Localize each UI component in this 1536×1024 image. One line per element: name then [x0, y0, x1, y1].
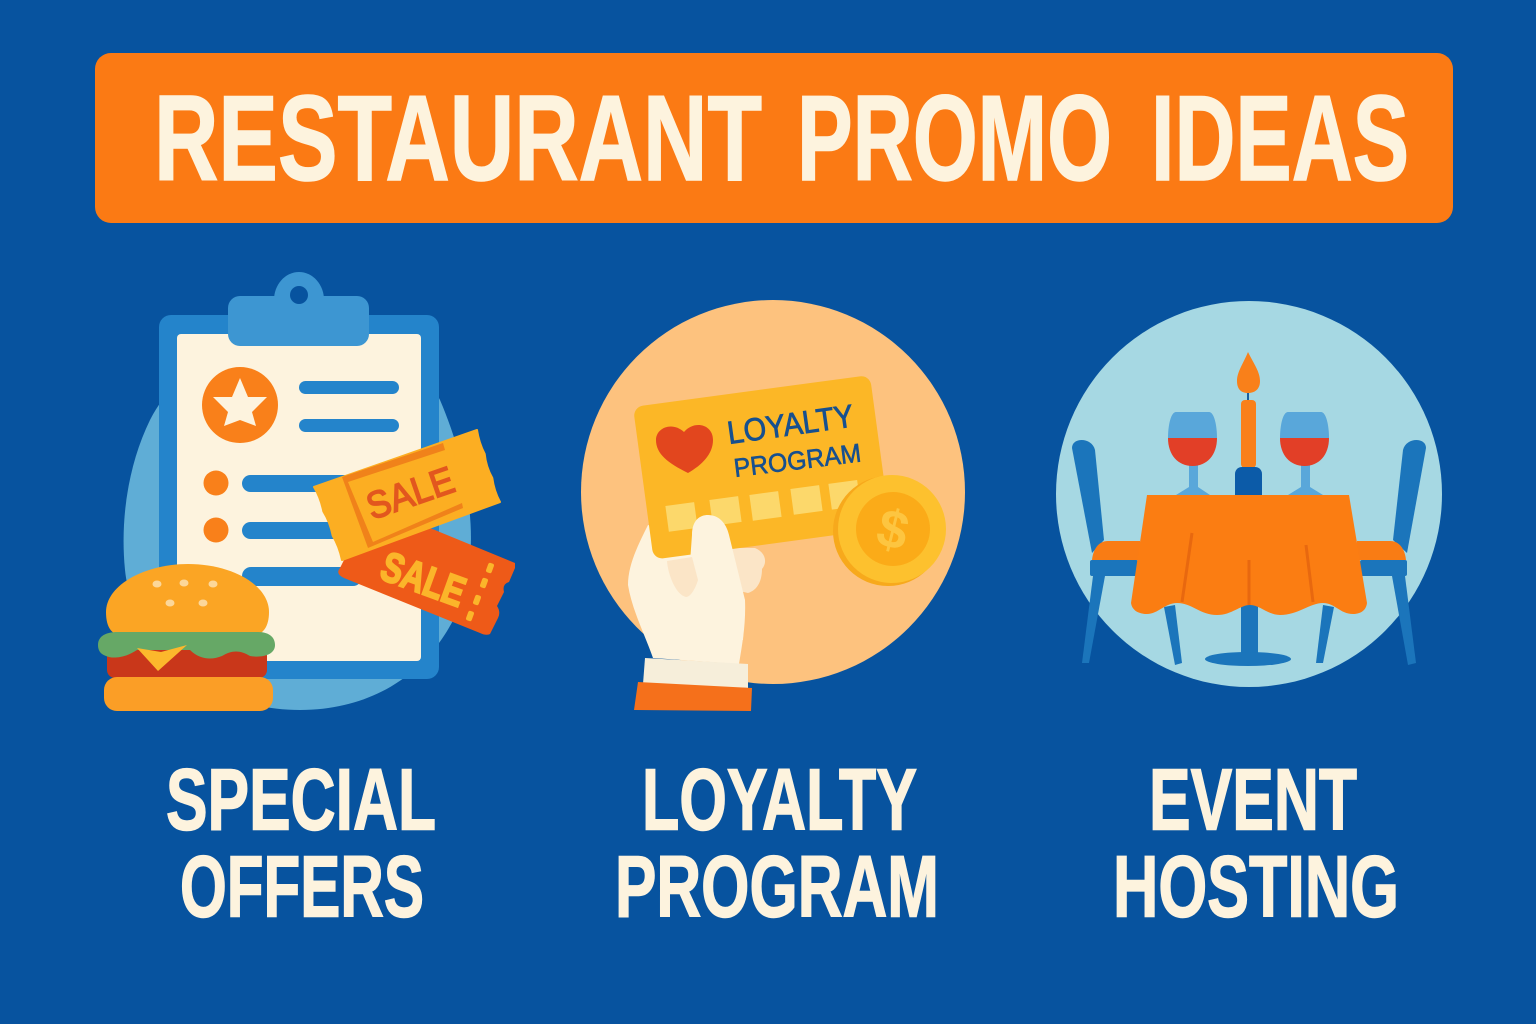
icon: yellow sale ticket — [314, 430, 500, 560]
label: special offers — [166, 752, 436, 936]
label: special offers: OFFERS — [180, 838, 424, 936]
icon: gold coin — [833, 475, 946, 586]
panel: event hosting illustration — [1056, 301, 1442, 687]
icon: gold coin: $ — [871, 497, 915, 563]
icon: peach circle — [581, 300, 965, 684]
icon: loyalty card: LOYALTY — [725, 398, 856, 451]
title: RESTAURANT — [154, 70, 762, 206]
icon: loyalty card: PROGRAM — [732, 438, 863, 483]
icon: right wine glass — [1280, 412, 1329, 495]
icon: burger — [98, 564, 275, 711]
label: event hosting: EVENT — [1149, 752, 1357, 848]
icon: clipboard — [159, 272, 439, 679]
label: event hosting — [1113, 752, 1399, 936]
icon: yellow sale ticket: SALE — [361, 459, 460, 529]
icon: candle — [1235, 352, 1262, 496]
icon: right chair — [1316, 440, 1426, 665]
label: loyalty program — [615, 752, 939, 936]
label: loyalty program: PROGRAM — [615, 838, 939, 936]
icon: left chair — [1072, 440, 1182, 665]
title: IDEAS — [1151, 70, 1409, 206]
title — [154, 70, 1409, 206]
icon: pale blue blob backdrop — [124, 340, 471, 710]
icon: loyalty card — [633, 375, 890, 560]
title banner — [95, 53, 1453, 223]
title: PROMO — [797, 70, 1112, 206]
label: loyalty program: LOYALTY — [642, 752, 917, 848]
icon: left wine glass — [1168, 412, 1217, 495]
icon: red sale ticket — [338, 528, 515, 635]
label: special offers: SPECIAL — [166, 752, 436, 848]
label: event hosting: HOSTING — [1113, 838, 1399, 936]
icon: thumb over card — [667, 515, 745, 640]
panel: loyalty program illustration — [581, 300, 965, 711]
icon: shirt cuff — [634, 658, 752, 711]
icon: light blue circle — [1056, 301, 1442, 687]
icon: orange tablecloth — [1131, 495, 1367, 615]
icon: hand behind card — [628, 525, 765, 664]
icon: red sale ticket: SALE — [375, 542, 472, 616]
panel: special offers illustration — [98, 272, 515, 711]
icon: table pedestal — [1205, 600, 1291, 666]
